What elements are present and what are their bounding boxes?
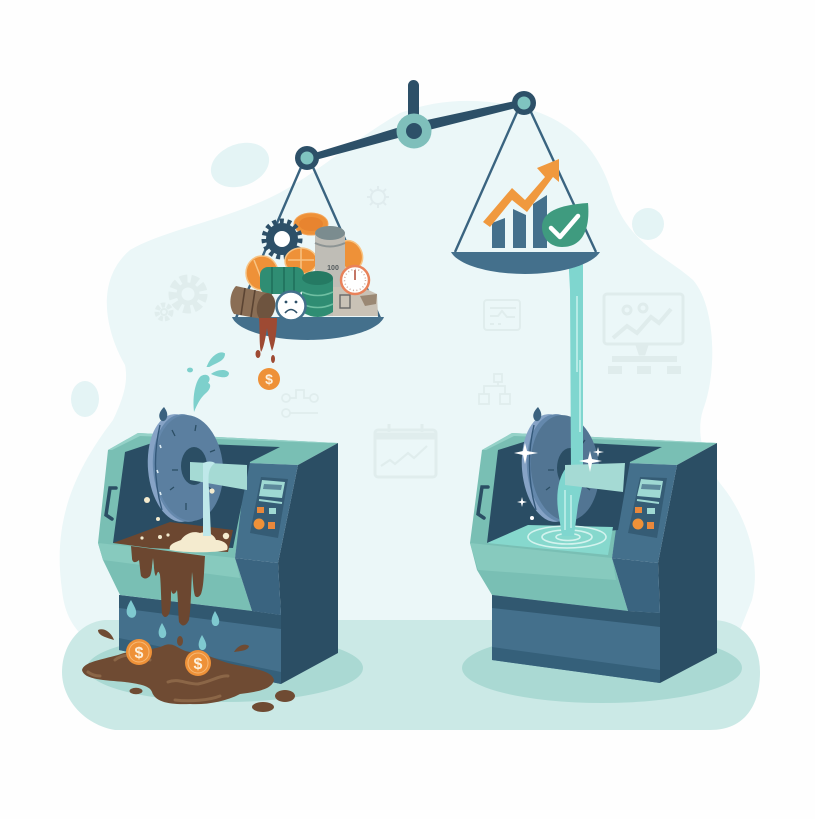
left joint [295, 146, 319, 170]
oil drips [256, 318, 277, 363]
green barrel upright [302, 271, 333, 317]
control face right [612, 463, 677, 563]
scale beam [308, 99, 524, 162]
left pan [232, 317, 384, 340]
puddle highlights [88, 655, 228, 701]
ripples [528, 526, 606, 548]
benefit chart [483, 159, 588, 248]
grey tank [315, 226, 345, 316]
falling coin [258, 368, 280, 390]
brown barrel [230, 286, 278, 323]
handle right [478, 487, 488, 518]
sad face [276, 292, 306, 320]
orange slices [246, 236, 367, 290]
right strings [455, 110, 596, 252]
green barrel lying [260, 267, 304, 294]
sparkles [514, 443, 604, 520]
faint icon: small gear [157, 305, 171, 319]
water fall into pool [557, 468, 582, 536]
droplet on wheel right [533, 407, 541, 421]
floor band [62, 620, 760, 730]
base right [492, 595, 660, 683]
leaf check badge [542, 203, 588, 247]
background blob [60, 101, 755, 650]
water drops left [127, 600, 219, 650]
cost pile [230, 213, 378, 390]
control panel left [250, 477, 288, 538]
right machine [470, 252, 717, 683]
pivot [396, 114, 432, 148]
left strings [236, 165, 380, 318]
droplet on wheel left [159, 407, 167, 421]
bars [492, 195, 547, 248]
floor shadow right [462, 633, 742, 703]
mud floor left [113, 522, 233, 552]
growth arrow [483, 159, 559, 227]
grinding wheel right [517, 411, 603, 525]
faint icon: small cog [367, 186, 389, 208]
spindle right [565, 463, 625, 492]
handle left [106, 488, 116, 519]
spindle left [190, 462, 247, 490]
grey machinery [333, 287, 378, 316]
mud puddle [82, 644, 274, 704]
faint icon: flowchart [282, 390, 318, 417]
grinding wheel left [143, 411, 227, 525]
foam [170, 532, 228, 552]
side panel left [278, 443, 338, 684]
foam bubbles [140, 488, 229, 540]
faint icon: monitor with chart [604, 294, 683, 370]
mud blobs [98, 629, 295, 712]
machine body left [98, 433, 338, 611]
coolant stream left [203, 462, 215, 536]
water pool right [487, 525, 613, 555]
faint icon: org tree [479, 374, 510, 404]
left machine [98, 407, 338, 684]
dollar coin 2: $ [194, 656, 203, 673]
dollar coin 2 [185, 650, 211, 676]
scale post [408, 80, 419, 125]
dollar coin 1: $ [135, 645, 144, 662]
control panel right [628, 477, 667, 538]
orange slice top [294, 213, 328, 235]
under panel right [612, 558, 660, 613]
clock [341, 266, 369, 294]
water stream column [568, 252, 583, 470]
machine body front band left [98, 543, 240, 578]
floor shadow left [87, 634, 363, 702]
interior left [113, 442, 280, 548]
right pan [451, 252, 600, 274]
base left [119, 595, 281, 684]
under panel left [235, 558, 281, 615]
faint icon: large gear [173, 279, 203, 309]
mud drips [131, 546, 205, 626]
machine body right [470, 433, 717, 611]
gear [264, 221, 300, 257]
right joint [512, 91, 536, 115]
dollar coin 1 [126, 639, 152, 665]
water splash [187, 354, 229, 412]
faint icon: calendar chart [375, 424, 436, 477]
faint icon: dashboard [484, 300, 520, 330]
balance scale [232, 80, 600, 340]
side panel right [658, 443, 717, 683]
machine body front band right [470, 543, 616, 580]
control face left [235, 463, 298, 563]
grey tank: 100 [327, 265, 339, 272]
interior right [487, 440, 662, 543]
falling coin: $ [265, 371, 273, 387]
